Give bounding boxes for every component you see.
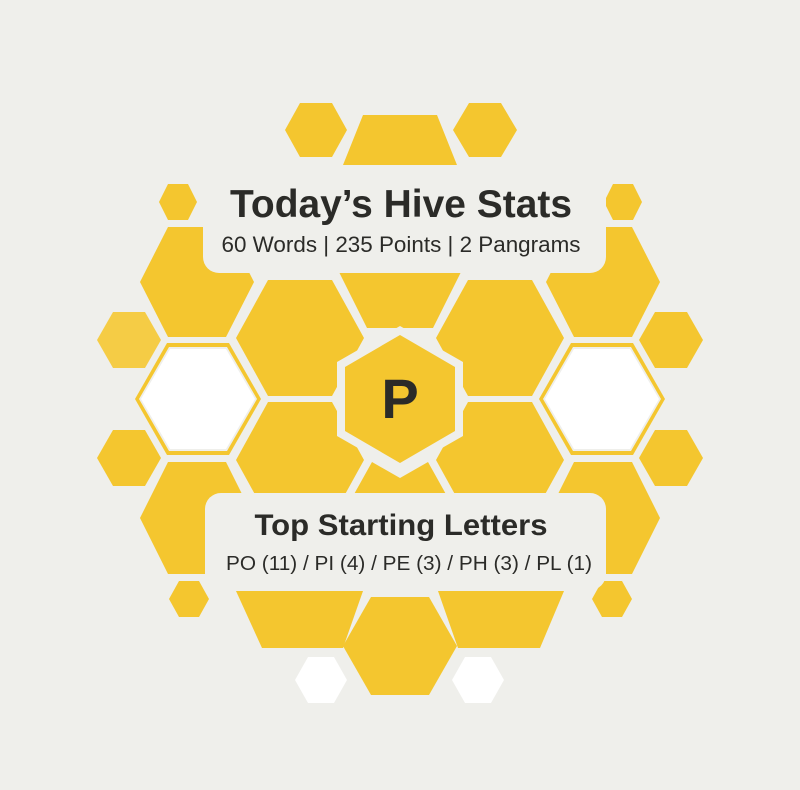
- heading: Top Starting Letters: [254, 509, 548, 542]
- hex: white right with yellow border: [532, 337, 672, 461]
- hex: far right upper: [639, 312, 703, 368]
- hex: top left small: [285, 103, 347, 157]
- hex: white small bottom right: [452, 657, 504, 703]
- hex: small left: [159, 184, 197, 220]
- subtitle stats: 60 Words | 235 Points | 2 Pangrams: [222, 232, 580, 257]
- hex: small low right: [592, 581, 632, 617]
- center P hex: [337, 326, 463, 472]
- hex: center right lower: [436, 402, 564, 518]
- hex: far left upper: [97, 312, 161, 368]
- trapezoid: top center: [343, 115, 457, 165]
- trapezoid: under P: [348, 462, 452, 505]
- honeycomb background: [97, 103, 703, 695]
- panel: top starting letters: [205, 493, 606, 590]
- hex: far left lower: [97, 430, 161, 486]
- hex: top right small: [453, 103, 517, 157]
- hex: center right upper: [436, 280, 564, 396]
- letter counts: PO (11) / PI (4) / PE (3) / PH (3) / PL (1): [226, 553, 592, 575]
- hex: upper side left: [140, 227, 254, 337]
- hex: center left lower: [236, 402, 364, 518]
- hex: lower side right: [546, 462, 660, 574]
- hex: small low left: [169, 581, 209, 617]
- hex: white left with yellow border: [128, 337, 268, 461]
- hex: far right lower: [639, 430, 703, 486]
- hex: center left upper: [236, 280, 364, 396]
- hex: bottom center: [343, 597, 457, 695]
- hex: upper side right: [546, 227, 660, 337]
- title: Today’s Hive Stats: [230, 183, 572, 226]
- trapezoid: bottom left: [236, 591, 363, 648]
- trapezoid: bottom right: [438, 591, 564, 648]
- hex: small right: [604, 184, 642, 220]
- letter P: P: [381, 367, 419, 430]
- hex: lower side left: [140, 462, 254, 574]
- hex: white small bottom left: [295, 657, 347, 703]
- trapezoid: top center under title: [337, 268, 463, 328]
- panel: hive stats title: [203, 172, 606, 273]
